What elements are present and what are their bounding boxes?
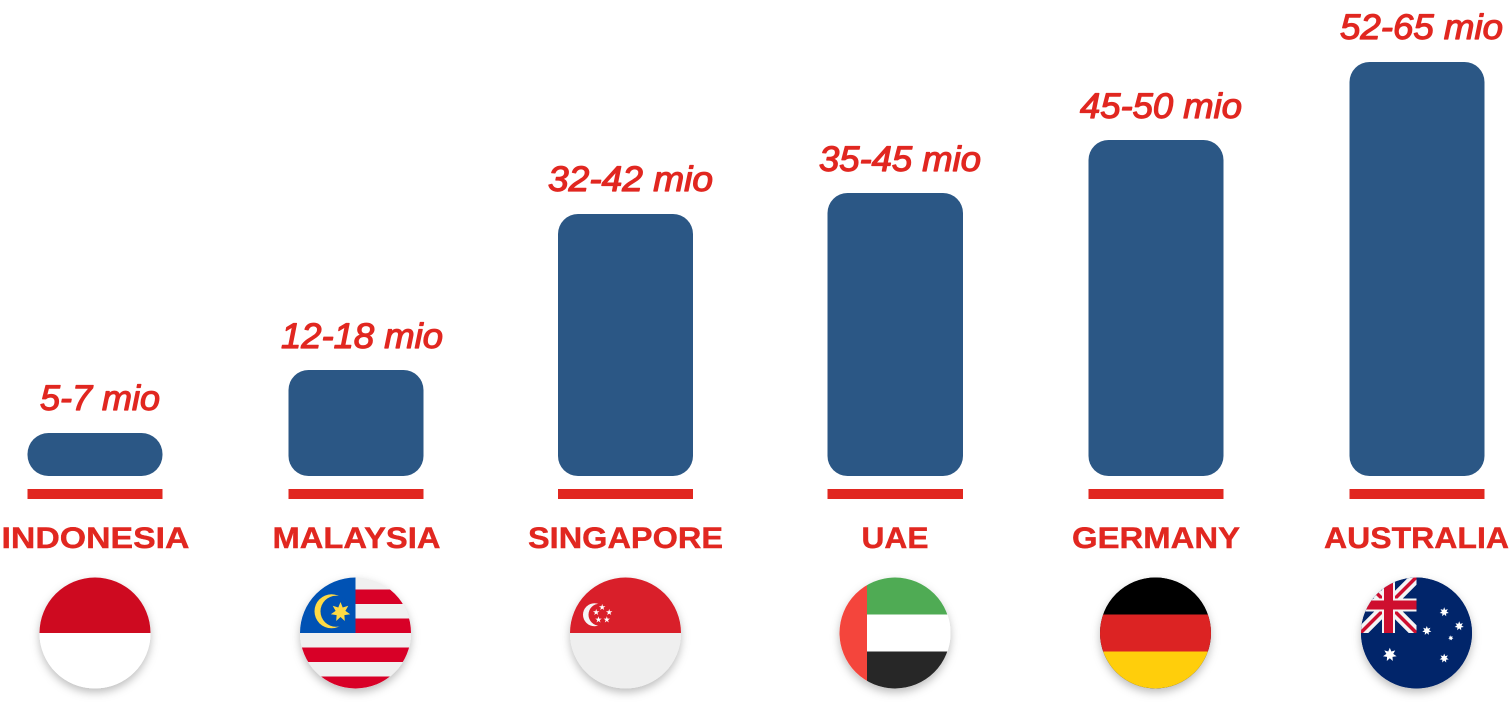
value label: 35-45 mio: 35-45 mio bbox=[819, 140, 981, 179]
column: Germany bbox=[1072, 87, 1242, 690]
baseline: UAE bbox=[828, 489, 963, 499]
value label: 52-65 mio: 52-65 mio bbox=[1340, 8, 1503, 47]
baseline: Germany bbox=[1088, 489, 1224, 499]
value label: 32-42 mio: 32-42 mio bbox=[548, 160, 713, 199]
country name: Indonesia: INDONESIA bbox=[2, 522, 190, 555]
country name: Australia: AUSTRALIA bbox=[1324, 522, 1509, 555]
column: Indonesia bbox=[2, 379, 190, 689]
bar: Singapore bbox=[558, 214, 693, 476]
icon: Singapore flag bbox=[570, 577, 682, 689]
icon: Germany flag bbox=[1100, 577, 1212, 690]
bar: UAE bbox=[828, 193, 963, 476]
icon: Malaysia flag bbox=[300, 577, 412, 690]
country name: Malaysia: MALAYSIA bbox=[272, 522, 440, 555]
baseline: Malaysia bbox=[288, 489, 424, 499]
column: Malaysia bbox=[272, 317, 443, 690]
value label: 45-50 mio: 45-50 mio bbox=[1080, 87, 1242, 126]
country name: UAE: UAE bbox=[862, 522, 928, 555]
value label: 5-7 mio: 5-7 mio bbox=[40, 379, 160, 418]
country name: Singapore: SINGAPORE bbox=[528, 522, 723, 555]
column: Australia bbox=[1324, 8, 1509, 689]
bar: Malaysia bbox=[288, 370, 424, 476]
bar: Indonesia bbox=[28, 433, 162, 476]
baseline: Australia bbox=[1350, 489, 1484, 499]
value label: 12-18 mio: 12-18 mio bbox=[281, 317, 443, 356]
column: UAE bbox=[819, 140, 981, 690]
baseline: Indonesia bbox=[28, 489, 162, 499]
icon: UAE flag bbox=[839, 577, 951, 690]
column: Singapore bbox=[528, 160, 723, 689]
baseline: Singapore bbox=[558, 489, 693, 499]
country name: Germany: GERMANY bbox=[1072, 522, 1240, 555]
icon: Indonesia flag bbox=[39, 577, 151, 689]
icon: Australia flag bbox=[1360, 577, 1472, 689]
bar: Germany bbox=[1088, 140, 1224, 476]
bar: Australia bbox=[1350, 62, 1484, 476]
